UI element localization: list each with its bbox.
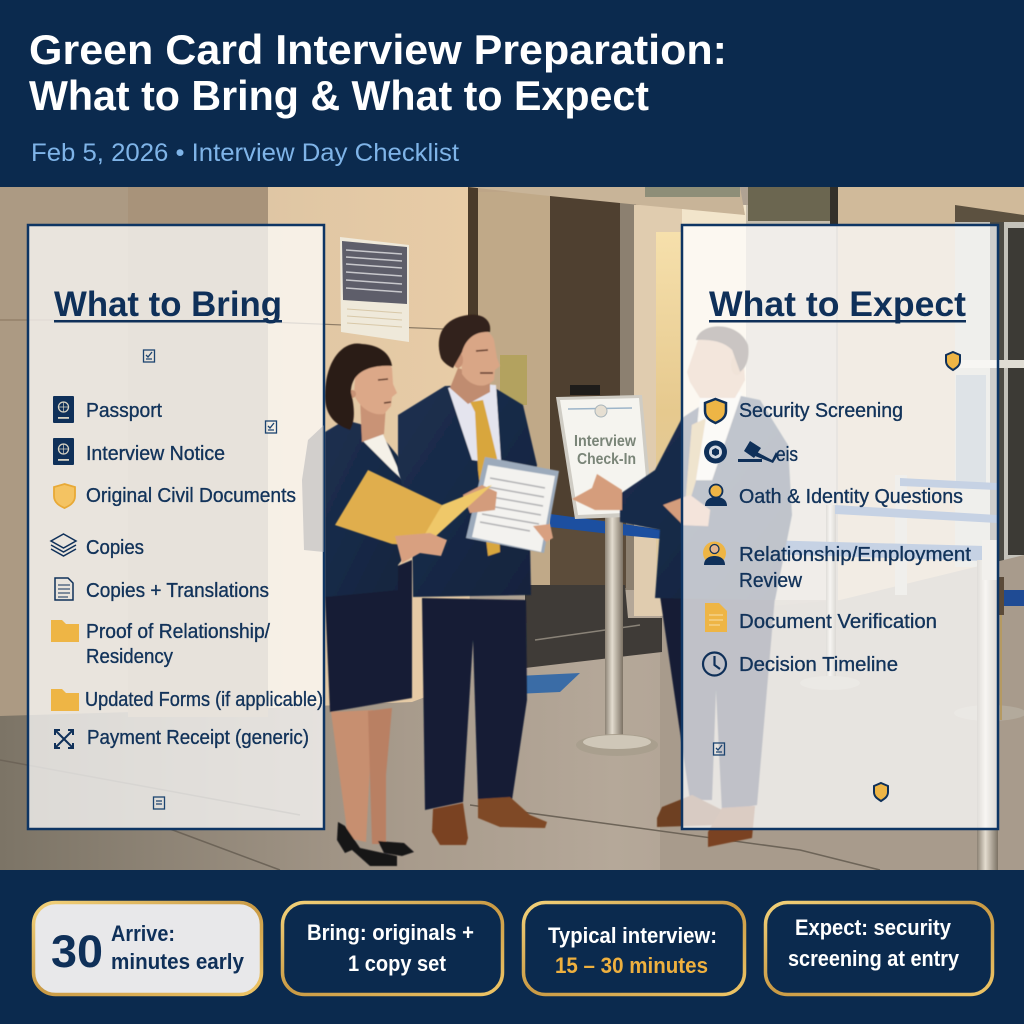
card: arrive early: Arrive: — [111, 921, 175, 946]
clipboard — [466, 457, 559, 553]
date subtitle: Feb 5, 2026 • Interview Day Checklist — [31, 139, 459, 167]
item: interview notice: Interview Notice — [86, 443, 225, 465]
shoes — [432, 803, 468, 845]
jacket — [398, 385, 537, 597]
item: relationship employment: Review — [739, 570, 803, 592]
item: decision timeline: Decision Timeline — [739, 654, 898, 676]
panel: what to expect — [682, 225, 998, 829]
gesturing hand — [572, 474, 622, 510]
icon: small checklist — [714, 743, 724, 755]
icon: small shield — [946, 352, 960, 370]
item: passport: Passport — [86, 400, 162, 422]
hands — [463, 485, 497, 513]
lintel and transom windows — [468, 187, 745, 215]
trousers — [660, 596, 775, 812]
blouse — [362, 432, 403, 480]
skirt — [325, 560, 412, 712]
info sign on wall — [340, 237, 409, 342]
title: Green Card Interview Preparation: — [29, 26, 727, 73]
item: gavel: eis — [776, 444, 798, 466]
sign: Interview Check-In: Check-In — [577, 451, 636, 468]
card: expect: screening at entry — [788, 946, 960, 971]
header band — [0, 0, 1024, 187]
title: What to Bring & What to Expect — [29, 72, 649, 119]
item: updated forms: Updated Forms (if applicable) — [85, 689, 323, 711]
right background stanchions — [762, 475, 1024, 721]
card: typical interview: 15 – 30 minutes — [555, 953, 708, 978]
heading: what to expect: What to Expect — [709, 285, 966, 324]
card: bring: Bring: originals + — [307, 920, 474, 945]
person: official gesturing (behind panel) — [572, 326, 792, 847]
card: typical interview: Typical interview: — [548, 923, 717, 948]
entrance recess — [468, 187, 640, 587]
person: man with clipboard — [398, 315, 559, 845]
person: woman with folder — [325, 344, 414, 866]
card: arrive early: minutes early — [111, 949, 245, 974]
icon: small checklist — [154, 797, 164, 809]
right wall — [838, 187, 1024, 602]
sunlit column — [268, 187, 470, 708]
item: document verification: Document Verification — [739, 611, 937, 633]
card: bring — [282, 902, 502, 994]
neck and head — [360, 398, 386, 442]
item: security screening: Security Screening — [739, 400, 903, 422]
jacket — [325, 420, 414, 597]
near stanchion right edge — [977, 540, 1004, 870]
icon: small shield — [874, 783, 888, 801]
card: arrive early: 30 — [51, 926, 103, 977]
item: proof of relationship: Residency — [86, 646, 173, 668]
dark mat — [525, 585, 662, 668]
item: relationship employment — [703, 542, 971, 592]
item: oath and identity: Oath & Identity Questions — [739, 486, 963, 508]
shirt — [448, 383, 501, 462]
heading: what to bring: What to Bring — [54, 285, 282, 324]
item: payment receipt: Payment Receipt (generic) — [87, 727, 309, 749]
neck and head — [450, 368, 490, 404]
door frame and glass — [634, 205, 684, 616]
sign: Interview Check-In — [556, 395, 653, 519]
item: original civil documents: Original Civil Documents — [86, 485, 296, 507]
right floor — [660, 555, 1024, 870]
card: typical interview — [524, 902, 744, 994]
item: copies: Copies — [86, 537, 144, 559]
item: passport — [53, 396, 162, 423]
item: copies + translations: Copies + Translations — [86, 580, 269, 602]
tie — [470, 400, 500, 556]
panel: what to bring — [28, 225, 324, 829]
photo background: building entrance — [0, 187, 1024, 870]
card: expect: Expect: security — [795, 915, 952, 940]
head — [687, 340, 745, 398]
shaded wall — [0, 187, 268, 716]
check-in stanchion and belt — [550, 395, 663, 756]
title — [29, 26, 727, 119]
silhouette ghost — [302, 425, 324, 552]
sign: Interview Check-In: Interview — [574, 433, 636, 450]
bottom band — [0, 870, 1024, 1024]
icon: small checklist — [144, 350, 154, 362]
card: arrive early — [34, 902, 262, 994]
item: proof of relationship: Proof of Relationship/ — [86, 621, 270, 643]
item: relationship employment: Relationship/Employment — [739, 544, 971, 566]
folder — [335, 470, 492, 563]
item: interview notice — [53, 438, 225, 465]
card: bring: 1 copy set — [348, 951, 447, 976]
item: proof of relationship — [51, 620, 270, 668]
legs — [331, 710, 373, 842]
jacket — [620, 392, 792, 600]
item: copies — [51, 534, 144, 559]
shoes — [337, 822, 397, 866]
shoes — [657, 795, 722, 827]
card: expect — [766, 902, 992, 994]
item: gavel — [704, 440, 798, 466]
trousers — [422, 598, 527, 810]
icon: small checklist — [266, 421, 276, 433]
item: document verification — [705, 603, 937, 633]
